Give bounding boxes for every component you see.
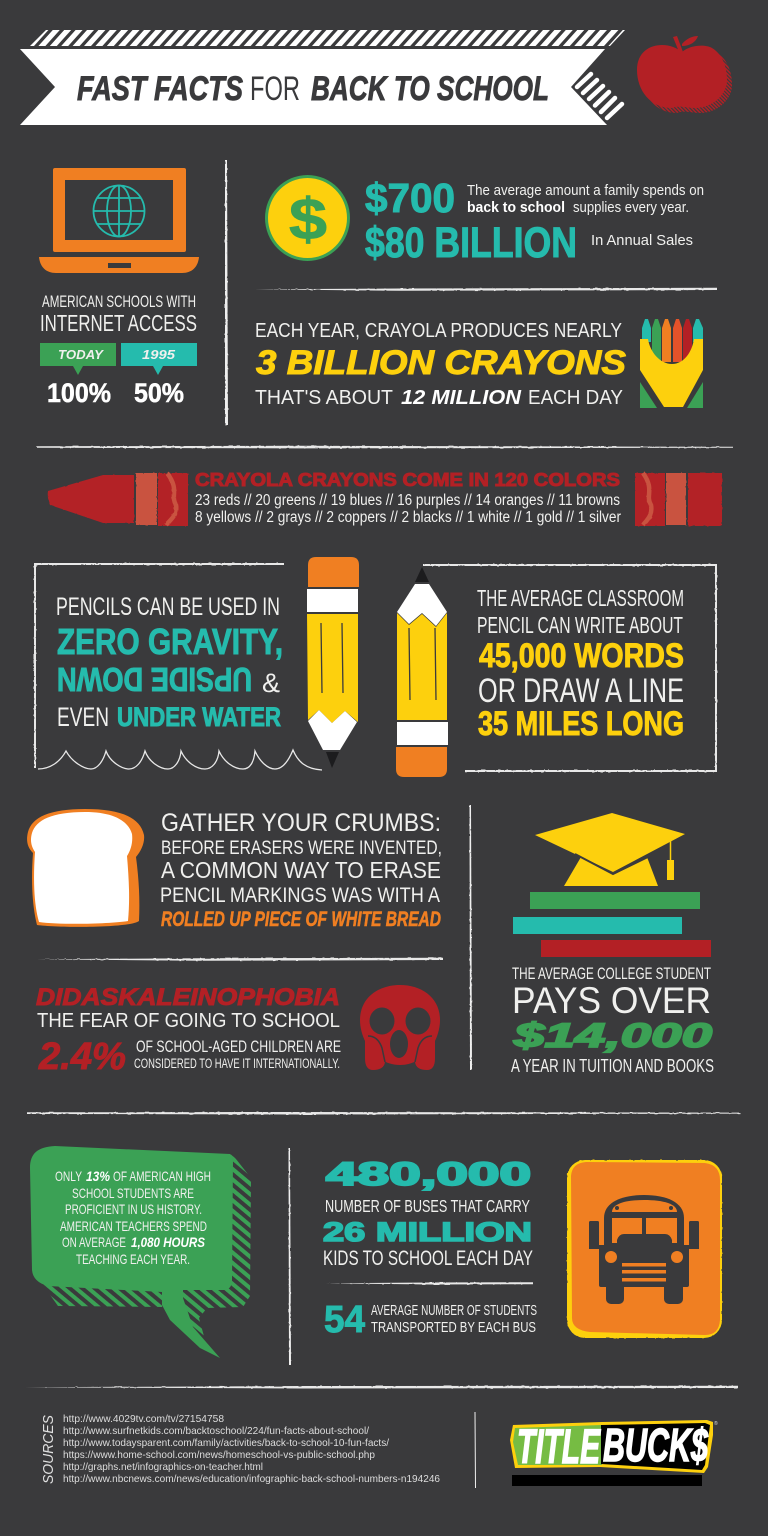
logo: TitleBucks: ®: [714, 1420, 718, 1427]
icon: apple: [637, 36, 732, 113]
stat: 80 billion: $80 BILLION: [365, 219, 577, 267]
pencil facts left: UNDER WATER: [117, 702, 281, 732]
tag: 1995: [121, 343, 197, 375]
bus facts text: 26 MILLION: [323, 1217, 532, 1247]
heading: internet access: [40, 292, 197, 336]
phobia fact text: [36, 984, 341, 1078]
bus facts text: 480,000: [326, 1156, 531, 1192]
icon: laptop: [39, 168, 199, 273]
bread fact text: GATHER YOUR CRUMBS:: [161, 809, 441, 837]
icon: dollar coin: [265, 175, 350, 261]
icon: crayon right end: [635, 473, 722, 526]
stat: 700 dollars: $700: [365, 175, 455, 221]
heading: FAST FACTS: [77, 70, 243, 108]
phobia fact text: OF SCHOOL-AGED CHILDREN ARE: [136, 1037, 341, 1056]
bus facts text: KIDS TO SCHOOL EACH DAY: [323, 1247, 533, 1270]
bread fact text: BEFORE ERASERS WERE INVENTED,: [161, 838, 442, 859]
sources list: http://graphs.net/infographics-on-teacher.html: [63, 1461, 263, 1473]
heading: [77, 70, 549, 108]
stat: 700 dollars: [365, 175, 704, 221]
sources list: http://www.surfnetkids.com/backtoschool/224/fun-facts-about-school/: [63, 1425, 369, 1437]
pencil facts left: EVEN: [57, 702, 109, 732]
value: 100%: 100%: [47, 378, 111, 408]
icon: graduation cap and books: [513, 813, 711, 957]
sources list: [63, 1413, 440, 1485]
bread fact text: [160, 809, 442, 931]
sources list: http://www.nbcnews.com/news/education/infographic-back-school-numbers-n194246: [63, 1473, 440, 1485]
heading: BACK TO SCHOOL: [311, 70, 549, 108]
tuition fact text: PAYS OVER: [512, 980, 711, 1021]
bread fact text: ROLLED UP PIECE OF WHITE BREAD: [161, 908, 441, 931]
title banner: [20, 30, 625, 125]
heading: FOR: [250, 70, 300, 108]
tuition fact text: [511, 964, 714, 1076]
pencil facts right: 35 MILES LONG: [478, 705, 684, 743]
icon: crayon box: [640, 319, 703, 408]
sources list: https://www.home-school.com/news/homeschool-vs-public-school.php: [63, 1449, 375, 1461]
phobia fact text: THE FEAR OF GOING TO SCHOOL: [37, 1010, 340, 1032]
sources list: http://www.4029tv.com/tv/27154758: [63, 1413, 224, 1425]
crayola production text: 12 MILLION: [401, 387, 522, 409]
bus facts text: [323, 1156, 533, 1270]
icon: crayon left end: [48, 473, 188, 526]
icon: globe: [94, 185, 144, 237]
banner ribbon: [20, 49, 607, 125]
tag: today: TODAY: [58, 348, 105, 362]
pencil facts left: &: [262, 668, 280, 698]
speech bubble: [30, 1146, 251, 1358]
panel: pencils right: [423, 565, 716, 771]
icon: bread slice: [27, 809, 144, 927]
crayon colors text: CRAYOLA CRAYONS COME IN 120 COLORS: [195, 470, 620, 490]
bubble text: [55, 1168, 211, 1267]
average students per bus: 54: [324, 1299, 365, 1341]
sources label: SOURCES: [41, 1415, 57, 1484]
pencil facts right: 45,000 WORDS: [479, 637, 684, 675]
pencil facts left: UPSIDE DOWN: [57, 661, 252, 698]
bubble text: TEACHING EACH YEAR.: [76, 1251, 190, 1267]
logo: TitleBucks: TITLE: [517, 1421, 601, 1474]
icon: pencil left: [307, 557, 359, 768]
pencil facts left: ZERO GRAVITY,: [57, 621, 283, 662]
pencil facts right: OR DRAW A LINE: [478, 672, 684, 710]
stat: 700 dollars: back to school: [467, 199, 565, 216]
average students per bus: TRANSPORTED BY EACH BUS: [371, 1319, 536, 1336]
crayola production text: EACH DAY: [528, 387, 623, 409]
internet access stat: [40, 292, 197, 408]
bubble text: ON AVERAGE: [62, 1234, 126, 1250]
phobia fact text: 2.4%: [38, 1036, 126, 1078]
value: 50%: 50%: [134, 378, 184, 408]
pencil facts right: [477, 585, 684, 743]
crayola production text: 3 BILLION CRAYONS: [256, 344, 626, 382]
average students per bus: [324, 1299, 537, 1341]
tag: 1995: 1995: [142, 348, 176, 362]
bus facts text: NUMBER OF BUSES THAT CARRY: [325, 1196, 530, 1216]
crayola production text: THAT'S ABOUT: [255, 387, 393, 409]
stat: 80 billion: In Annual Sales: [591, 232, 693, 249]
bubble text: SCHOOL STUDENTS ARE: [72, 1185, 194, 1201]
crayon colors text: 8 yellows // 2 grays // 2 coppers // 2 blacks // 1 white // 1 gold // 1 silver: [195, 509, 621, 526]
banner top stripes: [30, 30, 625, 46]
bubble text: 13%: [86, 1168, 110, 1184]
bubble text: AMERICAN TEACHERS SPEND: [60, 1218, 207, 1234]
phobia fact text: CONSIDERED TO HAVE IT INTERNATIONALLY.: [134, 1056, 340, 1071]
bread fact text: PENCIL MARKINGS WAS WITH A: [160, 884, 440, 907]
banner tail stripes: [577, 74, 622, 118]
crayola production text: EACH YEAR, CRAYOLA PRODUCES NEARLY: [255, 320, 622, 342]
icon: school bus: [567, 1160, 722, 1338]
bubble text: OF AMERICAN HIGH: [113, 1168, 211, 1184]
tag: today: [40, 343, 116, 375]
bubble text: 1,080 HOURS: [131, 1234, 206, 1250]
stat: 700 dollars: supplies every year.: [573, 199, 689, 216]
icon: scream face: [360, 985, 440, 1070]
heading: internet access: AMERICAN SCHOOLS WITH: [42, 292, 196, 311]
pencil facts left: [56, 593, 283, 732]
bubble text: ONLY: [55, 1168, 82, 1184]
icon: dollar coin: $: [289, 187, 327, 252]
crayon colors text: [195, 470, 621, 526]
bubble text: PROFICIENT IN US HISTORY.: [65, 1201, 202, 1217]
pencil facts left: PENCILS CAN BE USED IN: [56, 593, 280, 621]
heading: internet access: INTERNET ACCESS: [40, 310, 197, 336]
crayon colors text: 23 reds // 20 greens // 19 blues // 16 purples // 14 oranges // 11 browns: [195, 492, 620, 509]
phobia fact text: DIDASKALEINOPHOBIA: [36, 984, 340, 1011]
logo: TitleBucks: BUCK$: [603, 1419, 708, 1471]
waves: [38, 750, 322, 770]
average students per bus: AVERAGE NUMBER OF STUDENTS: [371, 1302, 537, 1319]
sources list: http://www.todaysparent.com/family/activities/back-to-school-10-fun-facts/: [63, 1437, 389, 1449]
logo: TitleBucks: [510, 1419, 718, 1486]
crayola production text: [255, 320, 626, 409]
panel: pencils left: [35, 564, 322, 770]
bread fact text: A COMMON WAY TO ERASE: [161, 857, 441, 883]
stat: 700 dollars: The average amount a family spends on: [467, 182, 704, 199]
icon: pencil right: [396, 567, 448, 777]
tuition fact text: $14,000: [512, 1017, 712, 1055]
